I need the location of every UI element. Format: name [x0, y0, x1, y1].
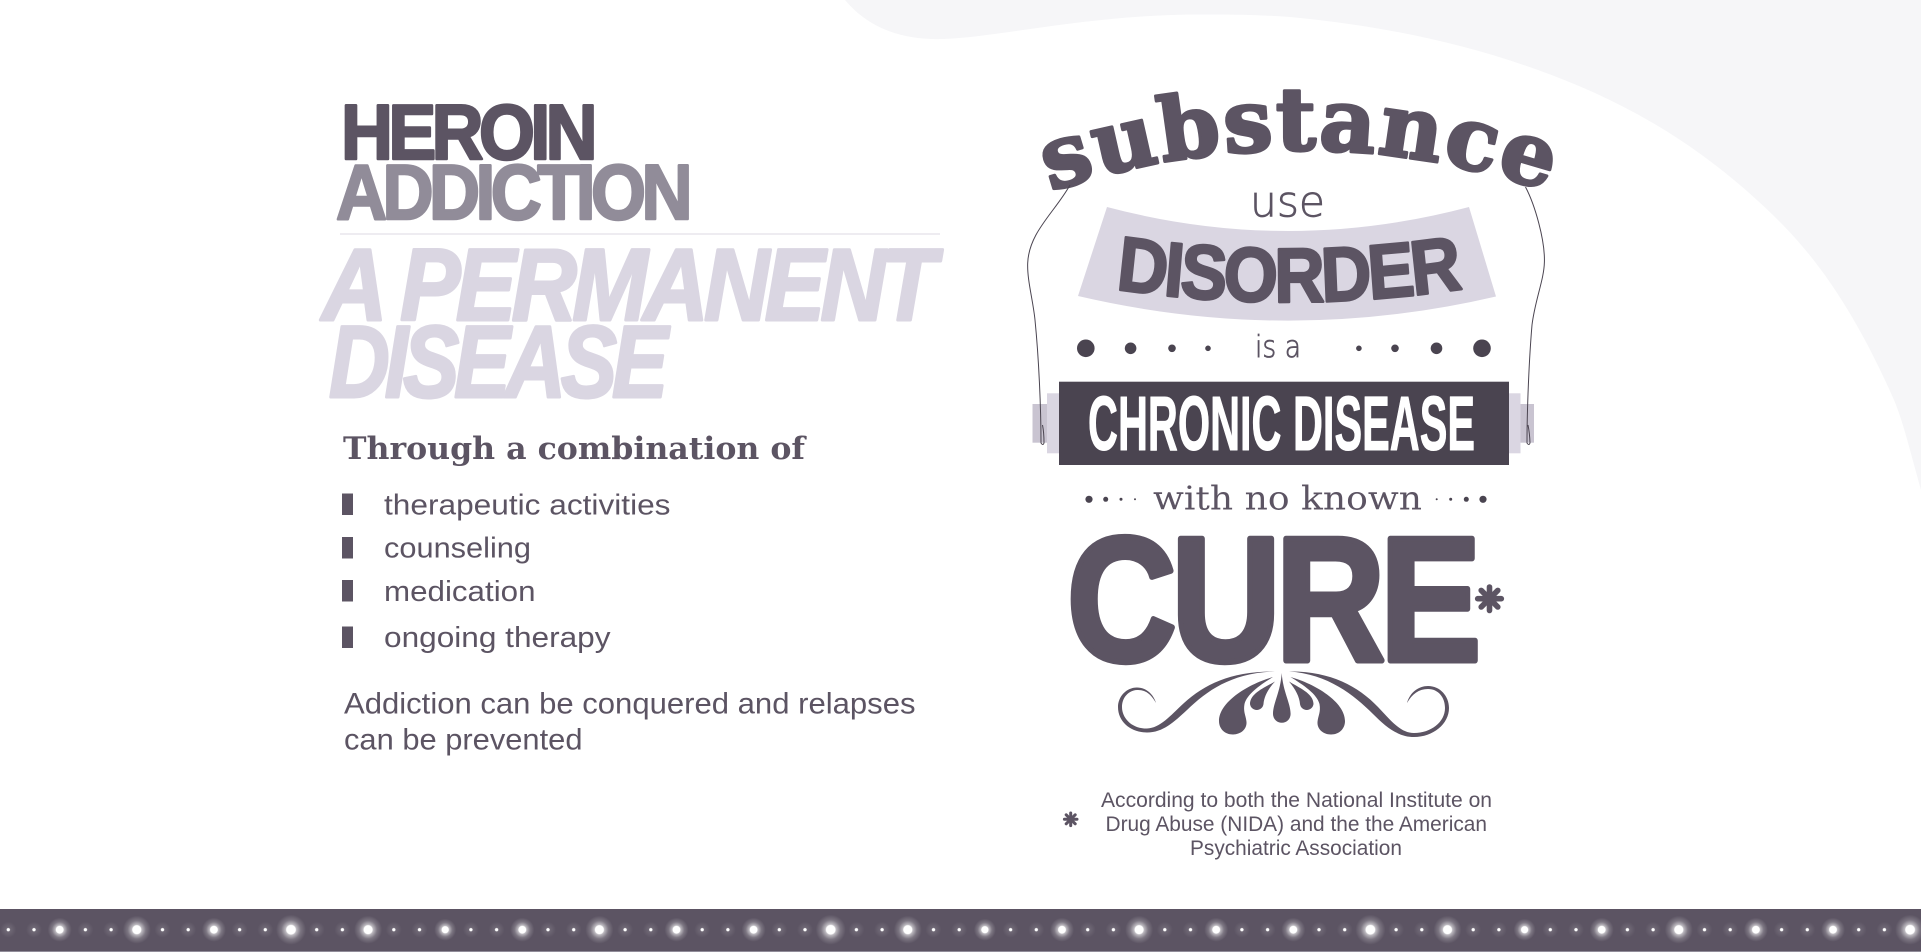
- words: with no known: with no known: [1153, 478, 1422, 518]
- subheading: through a combination of: Through a combination of: [343, 431, 807, 467]
- hanging thread right: [1526, 187, 1544, 444]
- heading: a permanent disease: A PERMANENT: [319, 228, 943, 342]
- title: heroin addiction: ADDICTION: [336, 148, 689, 236]
- bullet: therapeutic activities: therapeutic activities: [384, 490, 670, 522]
- band lights: small: [0, 922, 1892, 938]
- heading: a permanent disease: DISEASE: [329, 305, 670, 419]
- bullet: ongoing therapy: ongoing therapy: [384, 622, 611, 654]
- heading: a permanent disease: [319, 228, 943, 419]
- scroll ends behind chronic disease: [1032, 393, 1534, 453]
- icon: footnote asterisk: [1064, 813, 1077, 826]
- curved word: substance: substance: [1042, 89, 1553, 190]
- bullet: counseling: counseling: [384, 532, 531, 564]
- footnote text: Drug Abuse (NIDA) and the the American: [1106, 813, 1487, 836]
- dots left of is a: [1077, 340, 1211, 357]
- words: is a: is a: [1255, 330, 1301, 365]
- title: heroin addiction: HEROIN: [341, 88, 594, 176]
- band lower edge: [0, 951, 1921, 952]
- dots left of with no known: [1085, 496, 1136, 503]
- dots right of is a: [1356, 340, 1491, 357]
- bottom band: [0, 909, 1921, 951]
- background swoosh: [845, 0, 1921, 490]
- word: cure: CURE: [1067, 500, 1476, 698]
- title: heroin addiction: [336, 88, 689, 236]
- banner: disorder: [1078, 207, 1496, 321]
- bullet list: [342, 490, 670, 654]
- ornament: flourish: [1118, 671, 1449, 737]
- hanging thread left: [1028, 185, 1070, 444]
- closing statement: Addiction can be conquered and relapses: [344, 688, 916, 720]
- footnote text: According to both the National Institute on: [1101, 789, 1492, 812]
- word: disorder: DISORDER: [1119, 236, 1463, 304]
- band lights: large: [48, 915, 1921, 945]
- divider line: [340, 233, 940, 235]
- word: use: use: [1250, 178, 1325, 228]
- icon: asterisk after cure: [1478, 587, 1501, 610]
- dots right of with no known: [1436, 496, 1487, 503]
- closing statement: [344, 688, 916, 756]
- panel: chronic disease: CHRONIC DISEASE: [1088, 381, 1475, 467]
- closing statement: can be prevented: [344, 724, 582, 756]
- footnote text: Psychiatric Association: [1190, 837, 1402, 860]
- panel: chronic disease: [1059, 381, 1509, 467]
- bullet: medication: medication: [384, 576, 536, 608]
- footnote text: [1101, 789, 1492, 860]
